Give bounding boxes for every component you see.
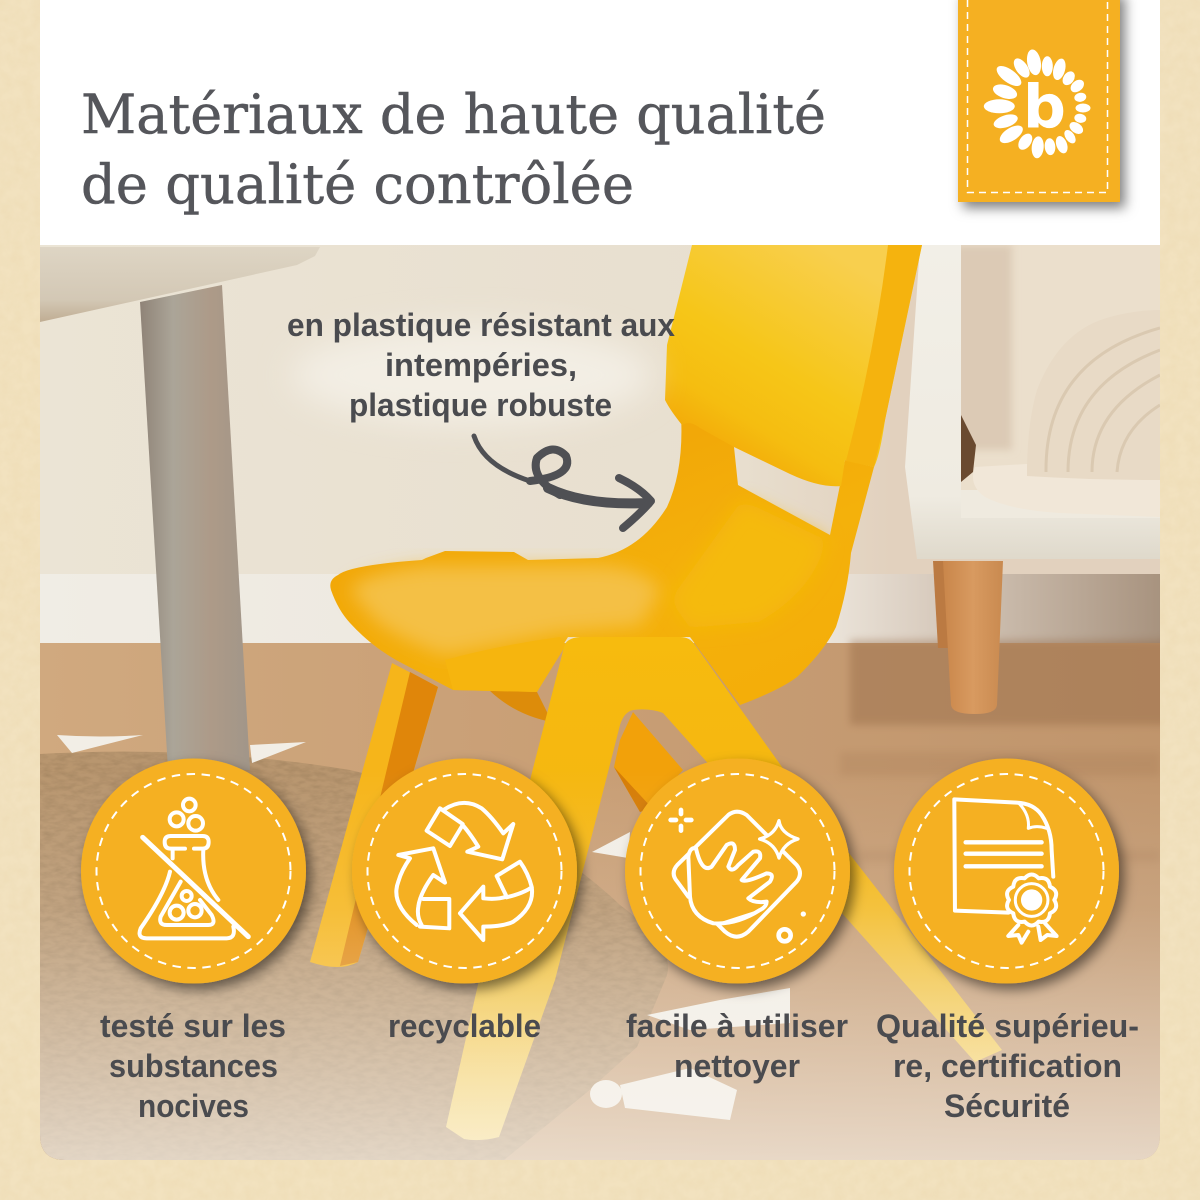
label: superior quality: re, certification <box>893 1048 1122 1084</box>
white cabinet frame <box>905 245 1160 559</box>
under-seat shell <box>490 691 548 720</box>
badge: certified quality <box>894 758 1119 984</box>
badge stitching <box>368 774 562 968</box>
badge stitching <box>910 774 1104 968</box>
floor shading behind cabinet <box>850 640 1170 725</box>
bottom fade <box>40 770 1160 1165</box>
photo: yellow chair in room <box>40 245 1170 1165</box>
tag body <box>958 0 1120 202</box>
title: Matériaux de haute qualité <box>81 83 826 146</box>
cabinet leg <box>943 561 1003 714</box>
white header panel <box>40 0 1160 246</box>
label: superior quality <box>876 1008 1139 1124</box>
inner shell highlight <box>670 500 826 628</box>
cushion <box>973 464 1160 490</box>
chair back-right leg <box>614 712 683 812</box>
icon: crossed-out flask <box>140 799 248 938</box>
cabinet interior <box>961 245 1160 490</box>
label: easy to clean: nettoyer <box>674 1048 800 1084</box>
chair body and seat <box>330 415 874 705</box>
icon: sunflower logo <box>984 48 1090 159</box>
logo letter: b <box>1023 72 1066 142</box>
seat surface highlight <box>350 566 660 655</box>
label: tested for harmful substances: testé sur les <box>100 1008 286 1044</box>
cabinet interior shadow <box>955 245 1012 450</box>
rainbow pillow <box>1027 310 1160 480</box>
icon: certificate with seal <box>954 799 1057 943</box>
cabinet back leg <box>933 561 948 648</box>
dark gap behind cushion <box>961 415 976 482</box>
callout: weather-resistant plastic <box>287 307 675 528</box>
cabinet shelf surface <box>961 490 1160 520</box>
title <box>81 83 826 216</box>
baseboard <box>40 574 1160 644</box>
badge disc <box>352 758 577 984</box>
chair front legs <box>446 637 1002 1140</box>
label: easy to clean: facile à utiliser <box>626 1008 848 1044</box>
wall <box>40 245 1160 580</box>
callout text <box>287 307 675 423</box>
table leg <box>140 285 250 770</box>
title: de qualité contrôlée <box>81 153 634 216</box>
rug <box>40 752 668 1160</box>
rug fringes <box>57 735 790 1120</box>
badge: no harmful substances <box>81 758 306 984</box>
callout text: en plastique résistant aux <box>287 307 675 343</box>
chair backrest <box>665 245 922 486</box>
badge stitching <box>640 774 834 968</box>
badge: recyclable <box>352 758 577 984</box>
brand tag <box>958 0 1120 202</box>
callout text: plastique robuste <box>349 387 612 423</box>
floor plank shading <box>840 752 1160 862</box>
seat front panel <box>445 637 566 692</box>
badge disc <box>81 758 306 984</box>
label: easy to clean <box>626 1008 848 1084</box>
label: superior quality: Qualité supérieu- <box>876 1008 1139 1044</box>
label: tested for harmful substances <box>100 1008 286 1124</box>
callout glow <box>292 325 652 425</box>
icon: hand wiping cloth <box>671 810 805 941</box>
label: recyclable: recyclable <box>388 1008 541 1044</box>
label: tested for harmful substances: substances <box>109 1048 278 1084</box>
badge disc <box>894 758 1119 984</box>
label: superior quality: Sécurité <box>944 1088 1070 1124</box>
table top <box>40 247 320 322</box>
badge: easy to clean <box>625 758 850 984</box>
backrest right edge <box>846 245 922 467</box>
callout text: intempéries, <box>385 347 577 383</box>
badge disc <box>625 758 850 984</box>
arrow: curl toward chair <box>474 436 651 528</box>
chair back-left leg <box>310 663 438 967</box>
icon: recycling arrows <box>396 803 532 940</box>
tag stitching <box>968 0 1108 192</box>
badge stitching <box>96 774 290 968</box>
label: tested for harmful substances: nocives <box>138 1088 249 1124</box>
wooden floor <box>40 643 1160 1163</box>
